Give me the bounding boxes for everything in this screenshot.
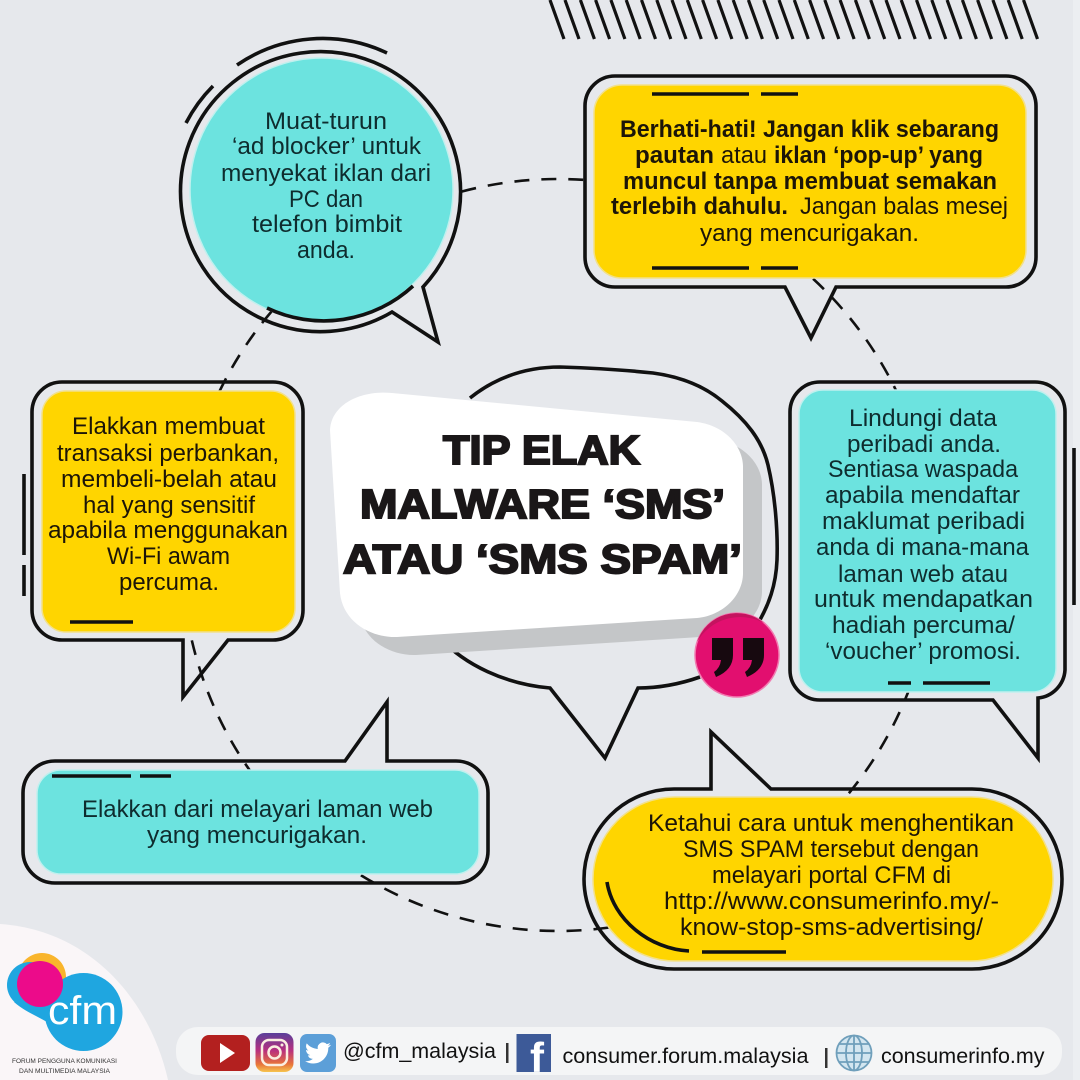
tip text: be careful: [611, 116, 1008, 247]
tip text: public Wi-Fi: Wi-Fi awam: [107, 543, 230, 570]
tip text: ad blocker: telefon bimbit: [252, 211, 402, 238]
tip text: be careful: terlebih dahulu.: [611, 193, 788, 220]
icon: YouTube: [201, 1035, 250, 1071]
icon: Twitter: [300, 1034, 336, 1072]
tip text: be careful: yang mencurigakan.: [700, 220, 919, 247]
tip text: ad blocker: [221, 108, 431, 264]
panel: public Wi-Fi tip box: [24, 382, 303, 697]
tip text: suspicious websites: [82, 796, 433, 849]
panel: CFM logo corner: [0, 924, 168, 1080]
tip text: public Wi-Fi: membeli-belah atau: [61, 466, 277, 493]
tip text: personal data: [814, 405, 1033, 665]
logo caption: [12, 1058, 117, 1075]
tip text: personal data: Lindungi data: [849, 405, 998, 432]
tip text: personal data: peribadi anda.: [847, 431, 1001, 458]
tip text: be careful: Jangan balas mesej: [800, 193, 1008, 220]
panel: social media footer bar: [176, 1027, 1062, 1080]
title text: MALWARE ‘SMS’: [360, 481, 725, 527]
tip text: public Wi-Fi: [48, 413, 288, 596]
panel: central title bubble: [330, 367, 777, 758]
icon: CFM logo: [7, 953, 122, 1051]
tip text: ad blocker: anda.: [297, 237, 355, 264]
icon: globe: [836, 1036, 872, 1070]
tip text: ad blocker: PC dan: [289, 186, 363, 213]
title card: [330, 393, 743, 637]
tip text: public Wi-Fi: percuma.: [119, 569, 219, 596]
tip text: public Wi-Fi: transaksi perbankan,: [57, 440, 279, 467]
tip text: personal data: apabila mendaftar: [825, 482, 1020, 509]
tip text: be careful: muncul tanpa membuat semakan: [623, 168, 997, 195]
panel: suspicious websites tip box: [23, 702, 488, 883]
tip text: ad blocker: ‘ad blocker’ untuk: [232, 133, 422, 160]
tip text: suspicious websites: yang mencurigakan.: [147, 822, 367, 849]
tip text: stop SMS spam: Ketahui cara untuk menghentikan: [648, 810, 1014, 837]
panel: stop SMS spam tip pill: [584, 732, 1062, 969]
tip text: be careful: iklan ‘pop-up’ yang: [774, 142, 983, 169]
tip text: stop SMS spam: know-stop-sms-advertising/: [680, 914, 983, 941]
tip text: stop SMS spam: melayari portal CFM di: [712, 862, 951, 889]
bubble outline behind title: [440, 367, 777, 758]
tip text: public Wi-Fi: hal yang sensitif: [83, 492, 255, 519]
icon: Facebook: [516, 1034, 551, 1080]
title text: TIP ELAK: [443, 427, 640, 473]
website: consumerinfo.my: consumerinfo.my: [881, 1045, 1045, 1068]
tip text: ad blocker: menyekat iklan dari: [221, 160, 431, 187]
tip text: suspicious websites: Elakkan dari melayari laman web: [82, 796, 433, 823]
panel: personal data tip box: [790, 382, 1074, 758]
logo caption: DAN MULTIMEDIA MALAYSIA: [19, 1068, 111, 1075]
icon: closing quotation mark badge: [695, 613, 779, 697]
tip text: stop SMS spam: [648, 810, 1014, 941]
handle: @cfm_malaysia: @cfm_malaysia: [343, 1040, 496, 1063]
tip text: ad blocker: Muat-turun: [265, 108, 387, 135]
title text: ATAU ‘SMS SPAM’: [343, 536, 742, 582]
title card shadow: [349, 412, 762, 655]
tip text: personal data: Sentiasa waspada: [828, 456, 1019, 483]
tip text: personal data: untuk mendapatkan: [814, 586, 1033, 613]
tip text: personal data: maklumat peribadi: [822, 508, 1025, 535]
panel: ad blocker tip circle: [181, 39, 461, 342]
tip text: be careful: atau: [721, 142, 767, 169]
handle: consumer.forum.malaysia: consumer.forum.malaysia: [562, 1045, 809, 1068]
tip text: personal data: hadiah percuma/: [832, 612, 1015, 639]
tip text: personal data: anda di mana-mana: [816, 534, 1030, 561]
tip text: stop SMS spam: http://www.consumerinfo.my/-: [664, 888, 999, 915]
logo caption: FORUM PENGGUNA KOMUNIKASI: [12, 1058, 117, 1065]
tip text: be careful: Berhati-hati! Jangan klik sebarang: [620, 116, 999, 143]
tip text: personal data: laman web atau: [838, 561, 1008, 588]
tip text: stop SMS spam: SMS SPAM tersebut dengan: [683, 836, 979, 863]
panel: be careful tip box: [585, 76, 1036, 338]
icon: CFM logo: cfm: [48, 989, 117, 1033]
tip text: be careful: pautan: [635, 142, 714, 169]
tip text: public Wi-Fi: apabila menggunakan: [48, 517, 288, 544]
tip text: personal data: ‘voucher’ promosi.: [825, 638, 1021, 665]
tip text: public Wi-Fi: Elakkan membuat: [72, 413, 265, 440]
title text: [343, 427, 742, 582]
icon: Instagram: [256, 1033, 294, 1072]
icon: Facebook: f: [530, 1034, 545, 1080]
